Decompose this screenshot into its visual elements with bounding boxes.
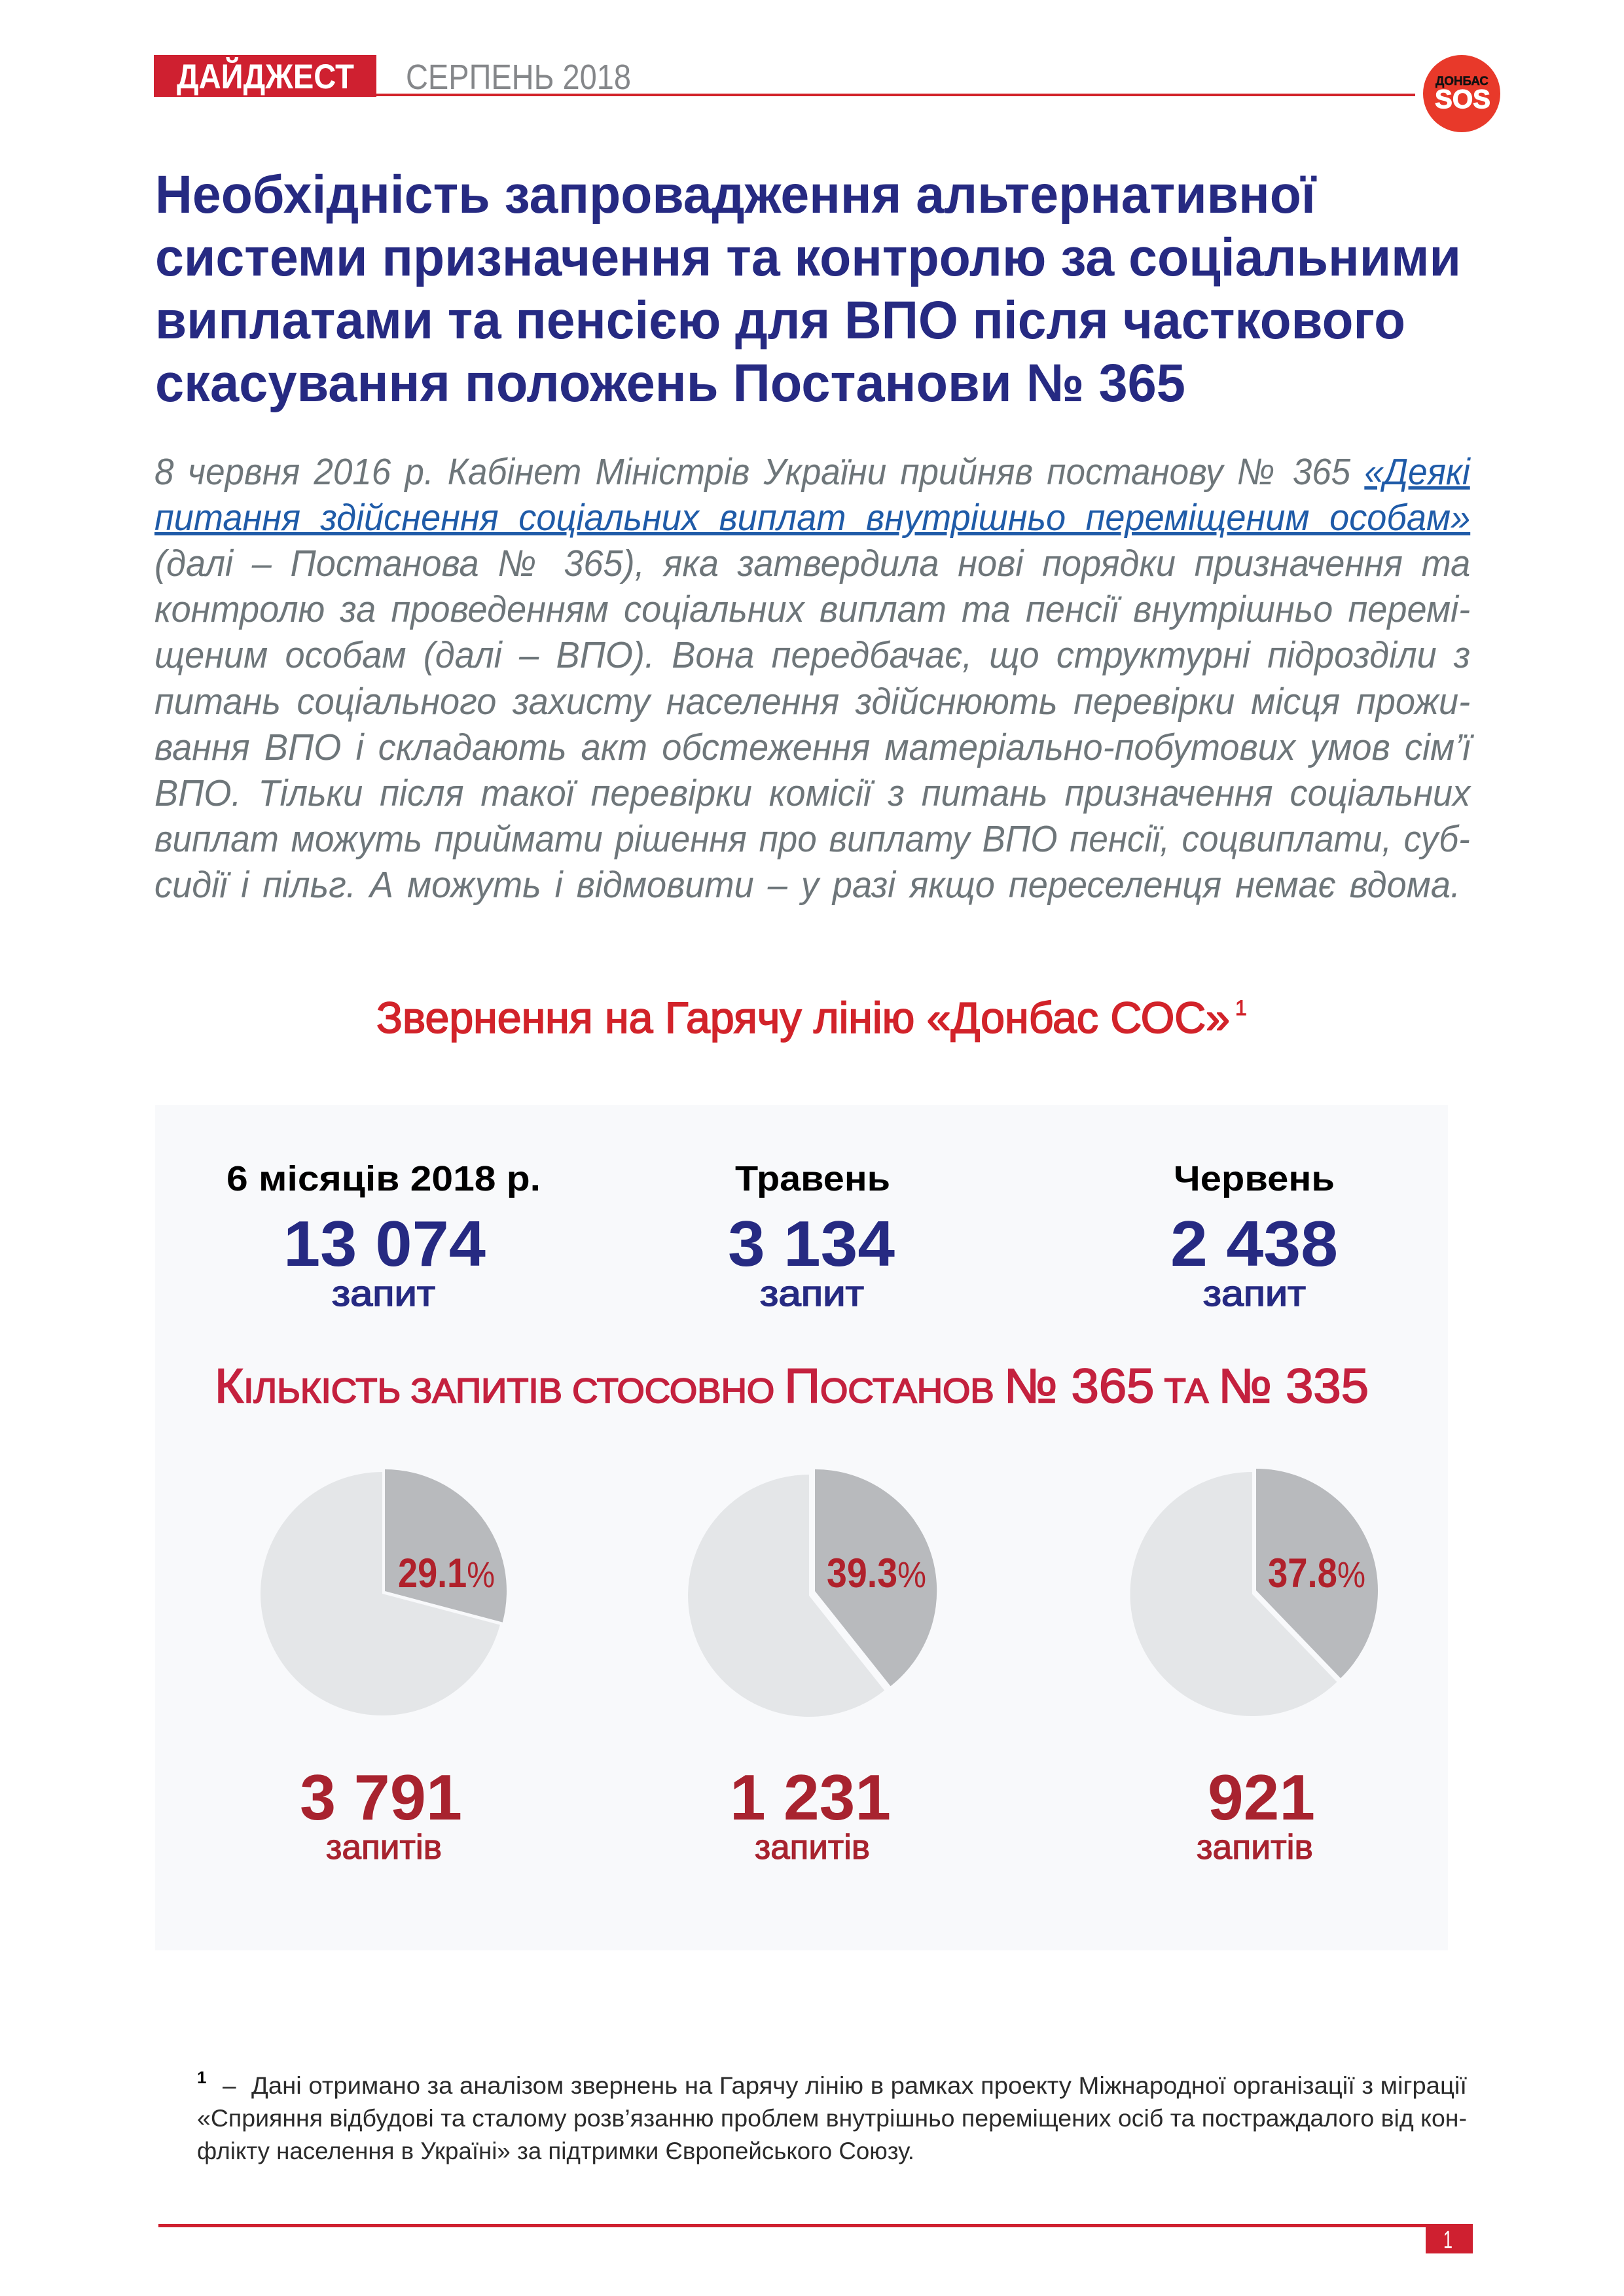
- intro paragraph: сидії і пільг. А можуть і відмовити – у разі якщо переселенця немає вдома.: [154, 864, 1460, 906]
- stat: June: 2 438: [1170, 1208, 1338, 1280]
- stat: 6 months 2018: 13 074: [283, 1208, 486, 1280]
- header bar: СЕРПЕНЬ 2018: [406, 58, 631, 97]
- stat: May: 3 134: [728, 1208, 895, 1280]
- title: системи призначення та контролю за соціальними: [155, 228, 1461, 287]
- title: Необхідність запровадження альтернативної: [155, 165, 1317, 224]
- section heading: hotline requests: Звернення на Гарячу лінію «Донбас СОС»: [376, 994, 1230, 1043]
- count: 3 791 requests: 3 791: [300, 1761, 462, 1833]
- pie chart: May, 39.3%: 39.3%: [827, 1551, 926, 1596]
- logo: Донбас SOS: ДОНБАС: [1435, 75, 1489, 88]
- title: скасування положень Постанови № 365: [155, 353, 1185, 413]
- intro paragraph: питань соціального захисту населення здійснюють перевірки місця прожи-: [154, 681, 1470, 723]
- stat: 6 months 2018: [226, 1159, 541, 1314]
- subheading: requests regarding resolutions: КІЛЬКІСТЬ ЗАПИТІВ СТОСОВНО ПОСТАНОВ № 365 ТА № 335: [215, 1359, 1369, 1413]
- pie chart: June, 37.8%: [1130, 1469, 1378, 1716]
- count: 921 requests: [1197, 1761, 1315, 1867]
- count: 1 231 requests: 1 231: [730, 1761, 891, 1833]
- stat: 6 months 2018: 6 місяців 2018 р.: [226, 1159, 541, 1198]
- logo: Донбас SOS: [1423, 55, 1500, 132]
- stat: June: Червень: [1174, 1159, 1335, 1198]
- footer line and page number: 1: [1443, 2227, 1453, 2254]
- intro paragraph: питання здійснення соціальних виплат внутрішньо переміщеним особам»: [154, 497, 1470, 539]
- intro paragraph: щеним особам (далі – ВПО). Вона передбачає, що структурні підрозділи з: [154, 634, 1470, 676]
- stat: May: запит: [760, 1273, 864, 1314]
- count: 3 791 requests: запитів: [326, 1828, 442, 1867]
- title: виплатами та пенсією для ВПО після часткового: [155, 291, 1405, 350]
- footnote: [197, 2068, 1467, 2164]
- stat: 6 months 2018: запит: [332, 1273, 435, 1314]
- count: 921 requests: запитів: [1197, 1828, 1313, 1867]
- intro paragraph: ВПО. Тільки після такої перевірки комісії з питань призначення соціальних: [154, 772, 1470, 814]
- pie chart: June, 37.8%: 37.8%: [1268, 1551, 1365, 1596]
- footnote: Дані отримано за аналізом звернень на Гарячу лінію в рамках проекту Міжнародної організації з міграції: [251, 2072, 1467, 2099]
- footer line and page number: [158, 2224, 1473, 2254]
- pie chart: 6 months, 29.1%: 29.1%: [398, 1551, 495, 1596]
- pie chart: May, 39.3%: [688, 1469, 937, 1717]
- stat: June: [1170, 1159, 1338, 1314]
- footnote: 1: [197, 2068, 206, 2087]
- count: 1 231 requests: запитів: [755, 1828, 870, 1867]
- count: 3 791 requests: [300, 1761, 462, 1867]
- header bar: ДАЙДЖЕСТ: [177, 56, 354, 96]
- stat: May: Травень: [735, 1159, 890, 1198]
- stat: June: запит: [1203, 1273, 1306, 1314]
- intro paragraph: виплат можуть приймати рішення про виплату ВПО пенсії, соцвиплати, суб-: [154, 818, 1470, 860]
- footnote: –: [223, 2072, 236, 2099]
- intro paragraph: (далі – Постанова № 365), яка затвердила нові порядки призначення та: [154, 543, 1470, 584]
- intro paragraph: вання ВПО і складають акт обстеження матеріально-побутових умов сім’ї: [154, 726, 1470, 768]
- count: 1 231 requests: [730, 1761, 891, 1867]
- count: 921 requests: 921: [1208, 1761, 1315, 1833]
- header bar: [154, 55, 1415, 97]
- pie chart: 6 months, 29.1%: [261, 1469, 507, 1715]
- section heading: hotline requests: 1: [1235, 996, 1247, 1020]
- title: [155, 165, 1461, 413]
- footnote: флікту населення в Україні» за підтримки Європейського Союзу.: [197, 2138, 914, 2164]
- footnote: «Сприяння відбудові та сталому розв’язанню проблем внутрішньо переміщених осіб та постраждалого від кон-: [197, 2105, 1467, 2132]
- panel: statistics background: [155, 1105, 1448, 1950]
- intro paragraph: 8 червня 2016 р. Кабінет Міністрів України прийняв постанову № 365 «Деякі: [154, 451, 1470, 493]
- logo: Донбас SOS: SOS: [1435, 85, 1490, 114]
- stat: May: [728, 1159, 895, 1314]
- intro paragraph: [154, 451, 1474, 906]
- intro paragraph: контролю за проведенням соціальних виплат та пенсії внутрішньо перемі-: [154, 588, 1470, 630]
